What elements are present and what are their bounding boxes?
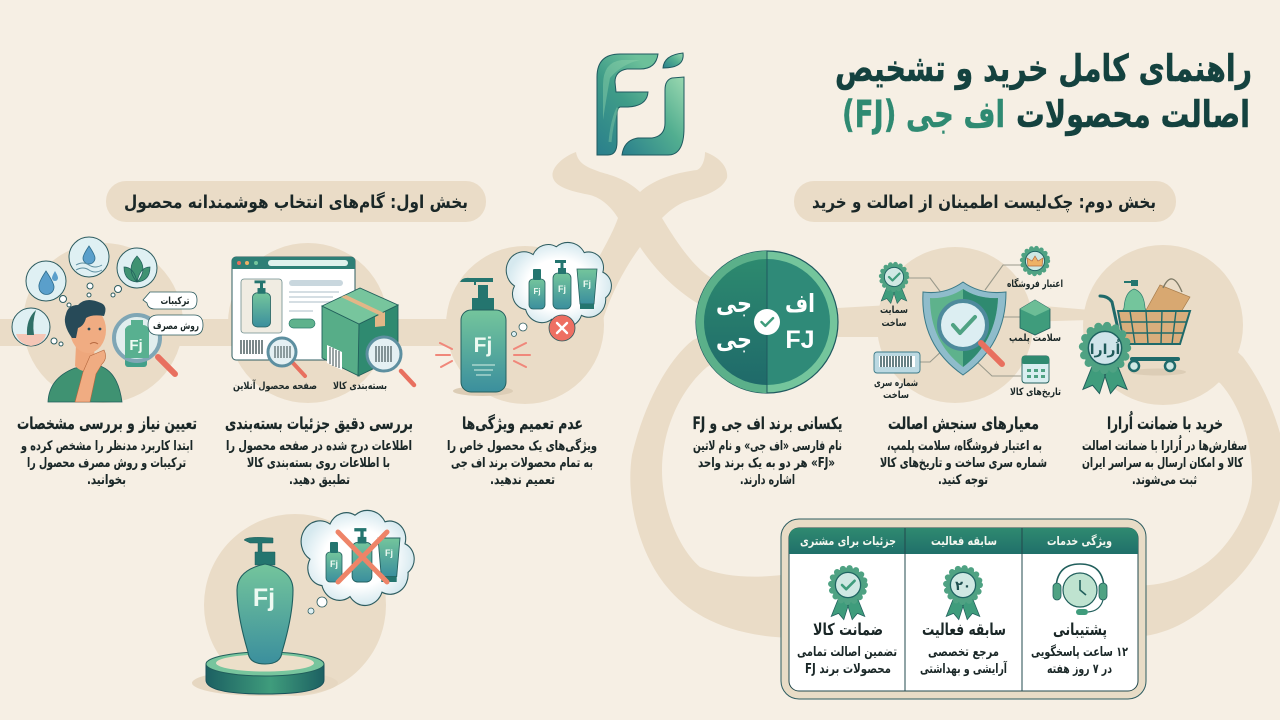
icon: FJ and Persian name disc: اف — [785, 289, 815, 318]
icon: bottle with thought cloud: Fj — [533, 287, 541, 296]
text block: authenticity criteria: توجه کنید. — [938, 473, 988, 488]
icon: browser page and box with magnifiers — [232, 257, 414, 392]
decorative swirl ribbon — [0, 152, 1280, 696]
icon: FJ and Persian name disc: FJ — [785, 326, 815, 354]
icon: bottle with thought cloud: Fj — [558, 284, 566, 294]
heading: packaging details: بررسی دقیق جزئیات بسته‌بندی — [225, 414, 413, 434]
column: support — [1031, 564, 1128, 677]
text block: Arara guarantee: ثبت می‌شوند. — [1132, 473, 1197, 488]
column: track record — [920, 568, 1007, 677]
heading: Arara guarantee: خرید با ضمانت اُرارا — [1107, 410, 1223, 434]
illustration: product on podium with crossed-out range — [192, 510, 414, 696]
illustration: product on podium with crossed-out range: Fj — [253, 584, 275, 612]
icon: browser page and box with magnifiers: بسته‌بندی کالا — [333, 381, 387, 392]
heading: do not generalise: عدم تعمیم ویژگی‌ها — [462, 413, 583, 434]
column: track record: مرجع تخصصی — [928, 645, 999, 660]
text block: do not generalise: به تمام محصولات برند اف جی — [451, 456, 593, 471]
icon: shield with magnifier and criteria: سمایت — [880, 305, 908, 316]
text block: do not generalise — [447, 438, 597, 488]
icon: FJ and Persian name disc — [696, 251, 838, 393]
text block: do not generalise: ویژگی‌های یک محصول خاص را — [447, 438, 597, 454]
step: Arara purchase — [1082, 279, 1247, 488]
icon: thinking person with need bubbles and magnifier — [12, 237, 203, 402]
heading: brand unity: یکسانی برند اف جی و FJ — [692, 414, 842, 434]
FJ logo — [597, 53, 684, 155]
text block: packaging details: اطلاعات درج شده در صفحه محصول را — [226, 439, 412, 454]
step: brand unity — [692, 251, 842, 488]
icon: bottle with thought cloud: Fj — [583, 279, 591, 289]
illustration: product on podium with crossed-out range: Fj — [330, 559, 338, 569]
text block: packaging details — [226, 439, 412, 488]
icon: shopping cart with badge: اُرارا — [1090, 339, 1120, 358]
text block: brand unity: «FJ» هر دو به یک برند واحد — [698, 456, 835, 471]
icon: bottle with thought cloud — [436, 242, 611, 396]
text block: do not generalise: تعمیم ندهید. — [490, 473, 555, 488]
text block: Arara guarantee — [1082, 435, 1247, 488]
text block: authenticity criteria: به اعتبار فروشگاه، سلامت پلمپ، — [887, 438, 1042, 454]
table header row: جزئیات برای مشتری — [800, 534, 896, 548]
section pill: part two: بخش دوم: چک‌لیست اطمینان از اصالت و خرید — [812, 192, 1156, 213]
icon: shield with magnifier and criteria: اعتبار فروشگاه — [1007, 277, 1063, 290]
comparison table panel — [781, 519, 1146, 699]
column: track record: ۲۰ — [955, 579, 971, 594]
text block: define need: ابتدا کاربرد مدنظر را مشخص کرده و — [20, 439, 193, 454]
icon: thinking person with need bubbles and magnifier: ترکیبات — [160, 296, 190, 307]
section pill: part one — [106, 181, 486, 222]
icon: shield with magnifier and criteria: ساخت — [883, 390, 909, 401]
text block: packaging details: تطبیق دهید. — [289, 473, 350, 488]
step: do not generalise — [436, 242, 611, 488]
table header row: سابقه فعالیت — [931, 534, 997, 548]
text block: packaging details: با اطلاعات روی بسته‌بندی کالا — [247, 456, 390, 471]
table header row — [789, 528, 1138, 554]
section pill: part two — [794, 181, 1176, 222]
icon: bottle with thought cloud: Fj — [474, 334, 492, 357]
table header row: ویژگی خدمات — [1047, 534, 1112, 549]
column: support: در ۷ روز هفته — [1047, 662, 1112, 677]
icon: shield with magnifier and criteria — [874, 248, 1063, 401]
column: support: پشتیبانی — [1053, 620, 1107, 640]
column: guarantee: تضمین اصالت تمامی — [797, 645, 897, 660]
icon: shield with magnifier and criteria: ساخت — [882, 318, 907, 329]
step: packaging details — [225, 257, 414, 488]
icon: FJ and Persian name disc: جی — [716, 289, 752, 318]
text block: authenticity criteria: شماره سری ساخت و تاریخ‌های کالا — [880, 456, 1047, 471]
illustration: product on podium with crossed-out range: Fj — [385, 548, 393, 558]
icon: shield with magnifier and criteria: شماره سری — [874, 378, 918, 389]
section pill: part one: بخش اول: گام‌های انتخاب هوشمندانه محصول — [124, 191, 468, 213]
text block: brand unity — [693, 439, 842, 488]
heading: authenticity criteria: معیارهای سنجش اصالت — [888, 414, 1039, 433]
text block: authenticity criteria — [880, 438, 1047, 488]
icon: shield with magnifier and criteria: تاریخ‌های کالا — [1010, 387, 1061, 398]
column: track record: سابقه فعالیت — [922, 620, 1006, 639]
column: guarantee: ضمانت کالا — [813, 620, 883, 639]
step: authenticity criteria — [874, 248, 1063, 488]
icon: shield with magnifier and criteria: سلامت پلمپ — [1009, 333, 1061, 344]
text block: define need: ترکیبات و روش مصرف محصول را — [27, 456, 186, 471]
heading: define need: تعیین نیاز و بررسی مشخصات — [17, 414, 197, 434]
icon: FJ and Persian name disc: جی — [716, 325, 752, 354]
text block: brand unity: اشاره دارند. — [740, 473, 795, 488]
icon: shopping cart with badge — [1082, 279, 1190, 394]
text block: brand unity: نام فارسی «اف جی» و نام لاتین — [693, 439, 842, 454]
column: guarantee — [797, 568, 897, 677]
column: track record: آرایشی و بهداشتی — [920, 660, 1007, 677]
icon: browser page and box with magnifiers: صفحه محصول آنلاین — [233, 379, 317, 392]
text block: define need: بخوانید. — [87, 473, 126, 488]
title: اف جی (FJ) — [842, 93, 1005, 136]
column: support: ۱۲ ساعت پاسخگویی — [1031, 644, 1128, 660]
text block: define need — [20, 439, 193, 488]
column: guarantee: محصولات برند FJ — [805, 662, 891, 677]
icon: thinking person with need bubbles and magnifier: روش مصرف — [153, 321, 199, 332]
step: define need — [12, 237, 203, 488]
title — [835, 47, 1252, 136]
icon: thinking person with need bubbles and magnifier: Fj — [129, 337, 143, 354]
